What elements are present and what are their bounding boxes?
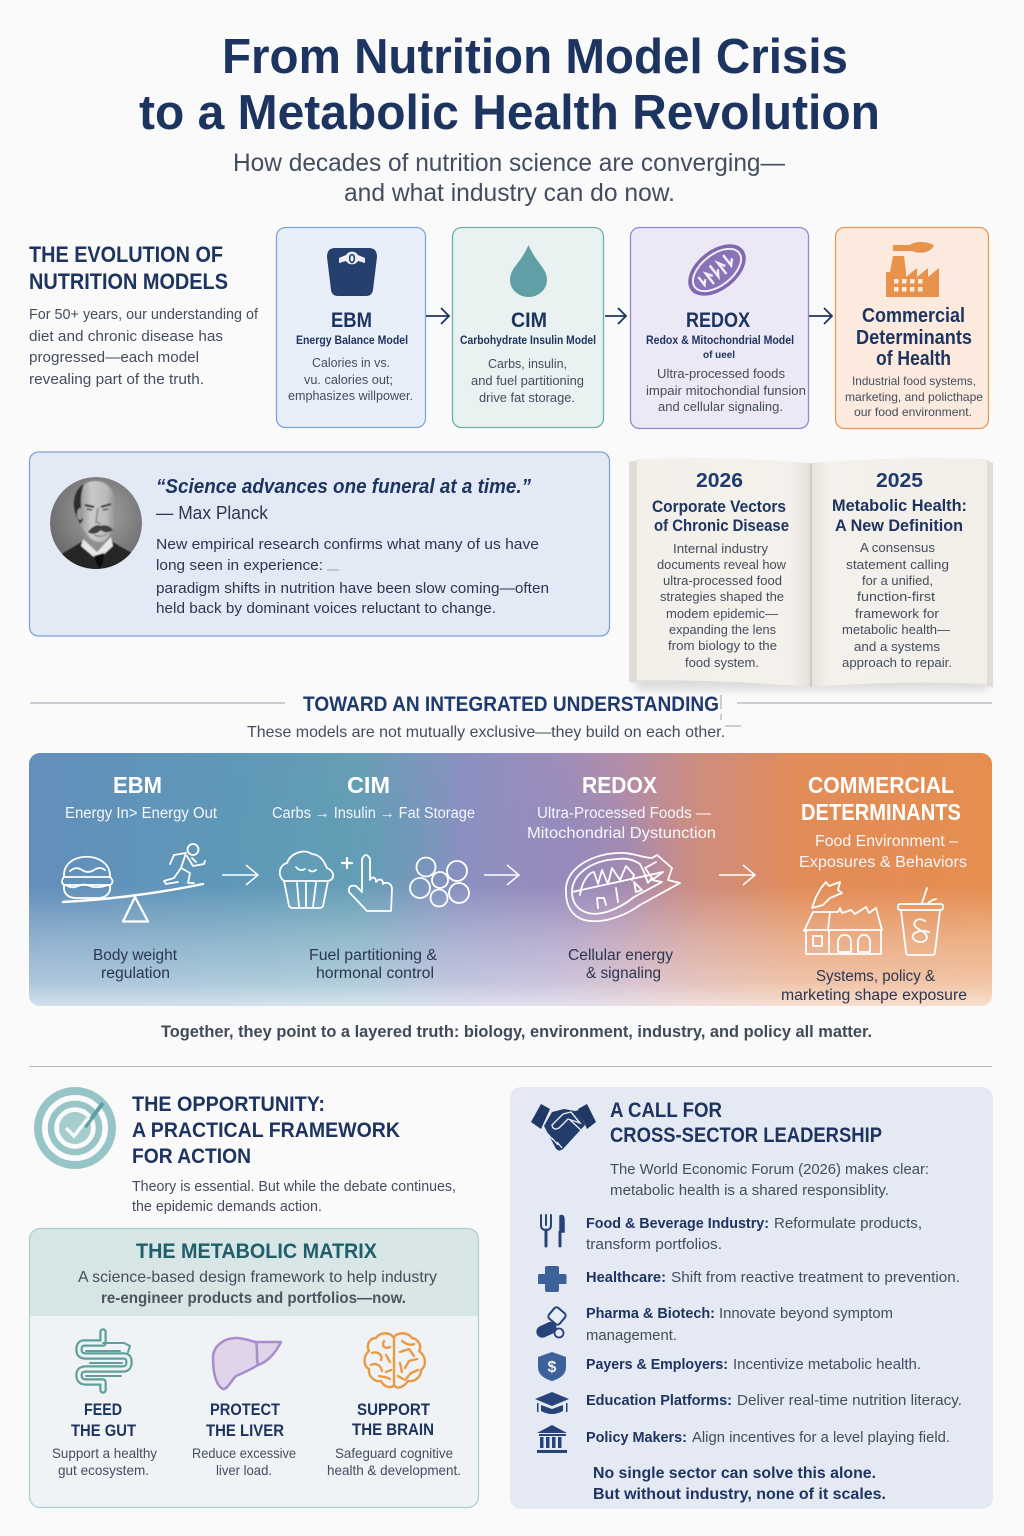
panel: Max Planck quote: long seen in experience:	[156, 557, 323, 574]
icon: medical cross	[538, 1266, 566, 1292]
section: the opportunity: the epidemic demands action.	[132, 1199, 322, 1215]
icon: pills	[534, 1306, 567, 1340]
list item: policy makers: Align incentives for a level playing field.	[692, 1430, 950, 1446]
list item: food and beverage industry	[541, 1215, 922, 1253]
list item: food and beverage industry: transform portfolios.	[586, 1237, 722, 1253]
book page: 2025: function-first	[857, 589, 935, 604]
list item: pharma and biotech: management.	[586, 1328, 677, 1344]
section intro: evolution of nutrition models: For 50+ years, our understanding of	[29, 306, 259, 323]
column: EBM: regulation	[101, 965, 170, 982]
book page: 2025: framework for	[855, 606, 940, 621]
panel: Max Planck quote	[30, 452, 610, 636]
list item: food and beverage industry: Reformulate products,	[774, 1216, 922, 1232]
panel: call for cross-sector leadership: CROSS-SECTOR LEADERSHIP	[610, 1124, 882, 1147]
column: support the brain: Safeguard cognitive	[335, 1445, 453, 1461]
icon: handshake	[531, 1104, 596, 1151]
icon: factory and drink cup	[804, 882, 943, 955]
section: the opportunity	[38, 1091, 456, 1215]
icon: weighing scale	[327, 248, 377, 296]
column: REDOX: Mitochondrial Dystunction	[527, 825, 716, 842]
card: commercial determinants: our food environment.	[854, 405, 972, 419]
icon: government building	[537, 1425, 567, 1453]
list item: policy makers: Policy Makers:	[586, 1430, 687, 1446]
card: commercial determinants: Industrial food systems,	[852, 374, 976, 388]
book page: 2026: ultra-processed food	[663, 573, 782, 588]
book page: 2026: documents reveal how	[657, 557, 787, 572]
section: the opportunity: Theory is essential. But while the debate continues,	[132, 1179, 456, 1195]
card: EBM: Calories in vs.	[312, 355, 390, 370]
panel: Max Planck quote: “Science advances one funeral at a time.”	[156, 476, 531, 498]
list item: healthcare: Shift from reactive treatment to prevention.	[671, 1270, 960, 1286]
icon: fork and knife	[541, 1215, 564, 1246]
book page: 2026: from biology to the	[668, 638, 777, 653]
section intro: evolution of nutrition models: diet and chronic disease has	[29, 328, 223, 345]
list item: healthcare	[538, 1266, 960, 1292]
card: CIM: drive fat storage.	[479, 390, 575, 405]
list item: pharma and biotech	[534, 1306, 893, 1344]
list item: education platforms	[535, 1392, 962, 1414]
panel: call for cross-sector leadership: metabolic health is a shared responsiblity.	[610, 1183, 889, 1199]
subtitle	[233, 149, 785, 207]
column: protect the liver: PROTECT	[210, 1401, 280, 1419]
arrow	[809, 308, 832, 324]
panel: the metabolic matrix: re-engineer products and portfolios—now.	[101, 1290, 406, 1307]
portrait: Max Planck	[50, 477, 142, 569]
list item: payers and employers	[538, 1352, 921, 1381]
card: EBM: Energy Balance Model	[296, 333, 408, 347]
card: EBM: vu. calories out;	[304, 372, 393, 387]
column: feed the gut: Support a healthy	[52, 1445, 157, 1461]
book page: 2026: expanding the lens	[669, 622, 776, 637]
column: feed the gut: gut ecosystem.	[58, 1462, 149, 1478]
book page: 2025: A New Definition	[835, 516, 963, 535]
list item: pharma and biotech: Innovate beyond symptom	[719, 1306, 893, 1322]
column: CIM	[272, 772, 475, 982]
icon: target with check	[38, 1091, 112, 1165]
card: CIM: Carbs, insulin,	[488, 356, 567, 371]
subtitle: How decades of nutrition science are converging—	[233, 149, 785, 177]
column: support the brain: health & development.	[327, 1462, 461, 1478]
panel: integrated model band	[29, 753, 992, 1006]
panel: the metabolic matrix: A science-based design framework to help industry	[78, 1269, 437, 1286]
book page: 2026: of Chronic Disease	[654, 516, 789, 535]
panel: Max Planck quote: — Max Planck	[156, 503, 269, 523]
open book with publications	[629, 458, 993, 690]
card: commercial determinants: Commercial	[862, 305, 965, 327]
icon: mitochondrion	[679, 234, 755, 306]
column: commercial determinants: Food Environment –	[815, 833, 958, 850]
icon: brain	[364, 1333, 425, 1388]
subheading: These models are not mutually exclusive—they build on each other.	[247, 724, 725, 741]
section: the opportunity: FOR ACTION	[132, 1144, 251, 1168]
book page: 2025: Metabolic Health:	[832, 496, 967, 515]
card: REDOX: Ultra-processed foods	[657, 366, 786, 381]
list item: education platforms: Education Platforms:	[586, 1393, 732, 1409]
card: EBM	[276, 228, 426, 428]
panel: the metabolic matrix: THE METABOLIC MATRIX	[136, 1240, 377, 1263]
arrow	[222, 865, 258, 885]
card: REDOX: Redox & Mitochondrial Model	[646, 333, 794, 347]
column: support the brain: THE BRAIN	[352, 1421, 434, 1439]
icon: mitochondrion outline	[566, 853, 680, 921]
arrow	[719, 865, 755, 885]
arrow	[605, 308, 626, 324]
column: support the brain: SUPPORT	[357, 1401, 430, 1419]
card: CIM	[452, 228, 604, 428]
book page: 2026: 2026	[696, 470, 743, 492]
column: REDOX: Cellular energy	[568, 947, 673, 964]
column: feed the gut: FEED	[84, 1401, 122, 1419]
list item: payers and employers: Payers & Employers:	[586, 1357, 728, 1373]
column: REDOX: REDOX	[582, 772, 658, 798]
card: REDOX: REDOX	[686, 309, 750, 332]
column: protect the liver: liver load.	[216, 1462, 272, 1478]
icon: graduation cap	[535, 1392, 569, 1414]
card: REDOX	[630, 228, 808, 428]
book page: 2026: food system.	[685, 655, 759, 670]
book page: 2025: metabolic health—	[842, 622, 950, 637]
column: REDOX: & signaling	[586, 965, 661, 982]
panel: Max Planck quote: paradigm shifts in nutrition have been slow coming—often	[156, 580, 549, 597]
column: commercial determinants: DETERMINANTS	[801, 799, 961, 825]
column: commercial determinants	[781, 772, 967, 1004]
panel: call for cross-sector leadership	[510, 1087, 993, 1509]
icon: factory	[886, 242, 939, 297]
panel: Max Planck quote: New empirical research confirms what many of us have	[156, 536, 539, 553]
column: commercial determinants: marketing shape exposure	[781, 987, 967, 1004]
panel: call for cross-sector leadership: A CALL FOR	[610, 1099, 722, 1122]
summary statement: Together, they point to a layered truth: biology, environment, industry, and policy all matter.	[161, 1023, 872, 1041]
section intro: evolution of nutrition models: revealing part of the truth.	[29, 371, 204, 388]
section: the opportunity: THE OPPORTUNITY:	[132, 1092, 325, 1116]
card: commercial determinants: of Health	[876, 348, 951, 370]
book page: 2025	[832, 470, 967, 670]
book page: 2026: Internal industry	[673, 541, 769, 556]
book page: 2026: strategies shaped the	[660, 589, 784, 604]
book page: 2026: Corporate Vectors	[652, 497, 786, 516]
card: CIM: CIM	[511, 309, 547, 332]
list item: pharma and biotech: Pharma & Biotech:	[586, 1306, 715, 1322]
card: REDOX: and cellular signaling.	[658, 399, 783, 414]
card: commercial determinants: marketing, and policthape	[845, 390, 983, 404]
panel: call for cross-sector leadership: The World Economic Forum (2026) makes clear:	[610, 1162, 929, 1178]
icon: shield with dollar: $	[548, 1359, 557, 1376]
card: REDOX: of ueel	[703, 349, 735, 361]
card: commercial determinants	[836, 228, 988, 428]
arrow	[484, 865, 519, 885]
closing statement: No single sector can solve this alone.	[593, 1465, 876, 1482]
book page: 2025: A consensus	[860, 540, 936, 555]
column: REDOX: Ultra-Processed Foods —	[537, 805, 711, 822]
column: protect the liver: THE LIVER	[206, 1422, 284, 1440]
card: CIM: Carbohydrate Insulin Model	[460, 333, 596, 347]
subtitle: and what industry can do now.	[344, 179, 675, 207]
column: CIM: Carbs → Insulin → Fat Storage	[272, 805, 475, 822]
card: REDOX: impair mitochondial funsion	[646, 383, 806, 398]
card: EBM: emphasizes willpower.	[288, 388, 413, 403]
title: From Nutrition Model Crisis	[222, 30, 848, 84]
icon: burger and runner on a balance	[62, 844, 205, 922]
card: EBM: EBM	[331, 309, 372, 332]
section: the opportunity: A PRACTICAL FRAMEWORK	[132, 1118, 400, 1142]
column: feed the gut: THE GUT	[71, 1422, 136, 1440]
column: CIM: hormonal control	[316, 965, 434, 982]
column: protect the liver: Reduce excessive	[192, 1445, 296, 1461]
panel: Max Planck quote: held back by dominant voices reluctant to change.	[156, 600, 496, 617]
card: CIM: and fuel partitioning	[471, 373, 584, 388]
book page: 2025: and a systems	[854, 639, 940, 654]
list item: education platforms: Deliver real-time nutrition literacy.	[737, 1393, 962, 1409]
column: REDOX	[527, 772, 716, 982]
column: CIM: CIM	[347, 772, 390, 798]
icon: water drop	[510, 245, 547, 297]
list item: policy makers	[537, 1425, 950, 1453]
section intro: evolution of nutrition models	[29, 242, 259, 388]
column: EBM	[62, 772, 218, 982]
book page: 2025: for a unified,	[862, 573, 933, 588]
heading: toward an integrated understanding: TOWARD AN INTEGRATED UNDERSTANDING	[303, 693, 719, 716]
book page: 2025: 2025	[876, 470, 923, 492]
section intro: evolution of nutrition models: NUTRITION MODELS	[29, 269, 228, 294]
book page: 2026	[652, 470, 789, 670]
card: commercial determinants: Determinants	[856, 327, 972, 349]
icon: liver	[213, 1338, 281, 1389]
list item: healthcare: Healthcare:	[586, 1270, 666, 1286]
column: protect the liver	[192, 1338, 296, 1478]
list item: food and beverage industry: Food & Beverage Industry:	[586, 1216, 769, 1232]
column: commercial determinants: Systems, policy &	[816, 968, 936, 985]
closing statement	[593, 1465, 886, 1503]
title: to a Metabolic Health Revolution	[139, 86, 880, 140]
column: commercial determinants: Exposures & Behaviors	[799, 854, 967, 871]
book page: 2026: modem epidemic—	[666, 606, 778, 621]
column: EBM: Body weight	[93, 947, 178, 964]
column: support the brain	[327, 1333, 461, 1478]
column: EBM: Energy In> Energy Out	[65, 805, 218, 822]
book page: 2025: statement calling	[846, 557, 949, 572]
icon: gut	[79, 1332, 130, 1390]
list item: payers and employers: Incentivize metabolic health.	[733, 1357, 921, 1373]
title	[139, 30, 880, 140]
section intro: evolution of nutrition models: THE EVOLUTION OF	[29, 242, 223, 267]
panel: the metabolic matrix	[29, 1228, 479, 1508]
column: feed the gut	[52, 1332, 157, 1478]
column: commercial determinants: COMMERCIAL	[808, 772, 954, 798]
closing statement: But without industry, none of it scales.	[593, 1486, 886, 1503]
arrow	[426, 308, 449, 324]
section intro: evolution of nutrition models: progressed—each model	[29, 349, 199, 366]
column: CIM: Fuel partitioning &	[309, 947, 438, 964]
column: EBM: EBM	[113, 772, 162, 798]
icon: muffin, hand and fat cells	[280, 852, 469, 911]
icon: shield with dollar	[538, 1352, 566, 1381]
book page: 2025: approach to repair.	[842, 655, 952, 670]
